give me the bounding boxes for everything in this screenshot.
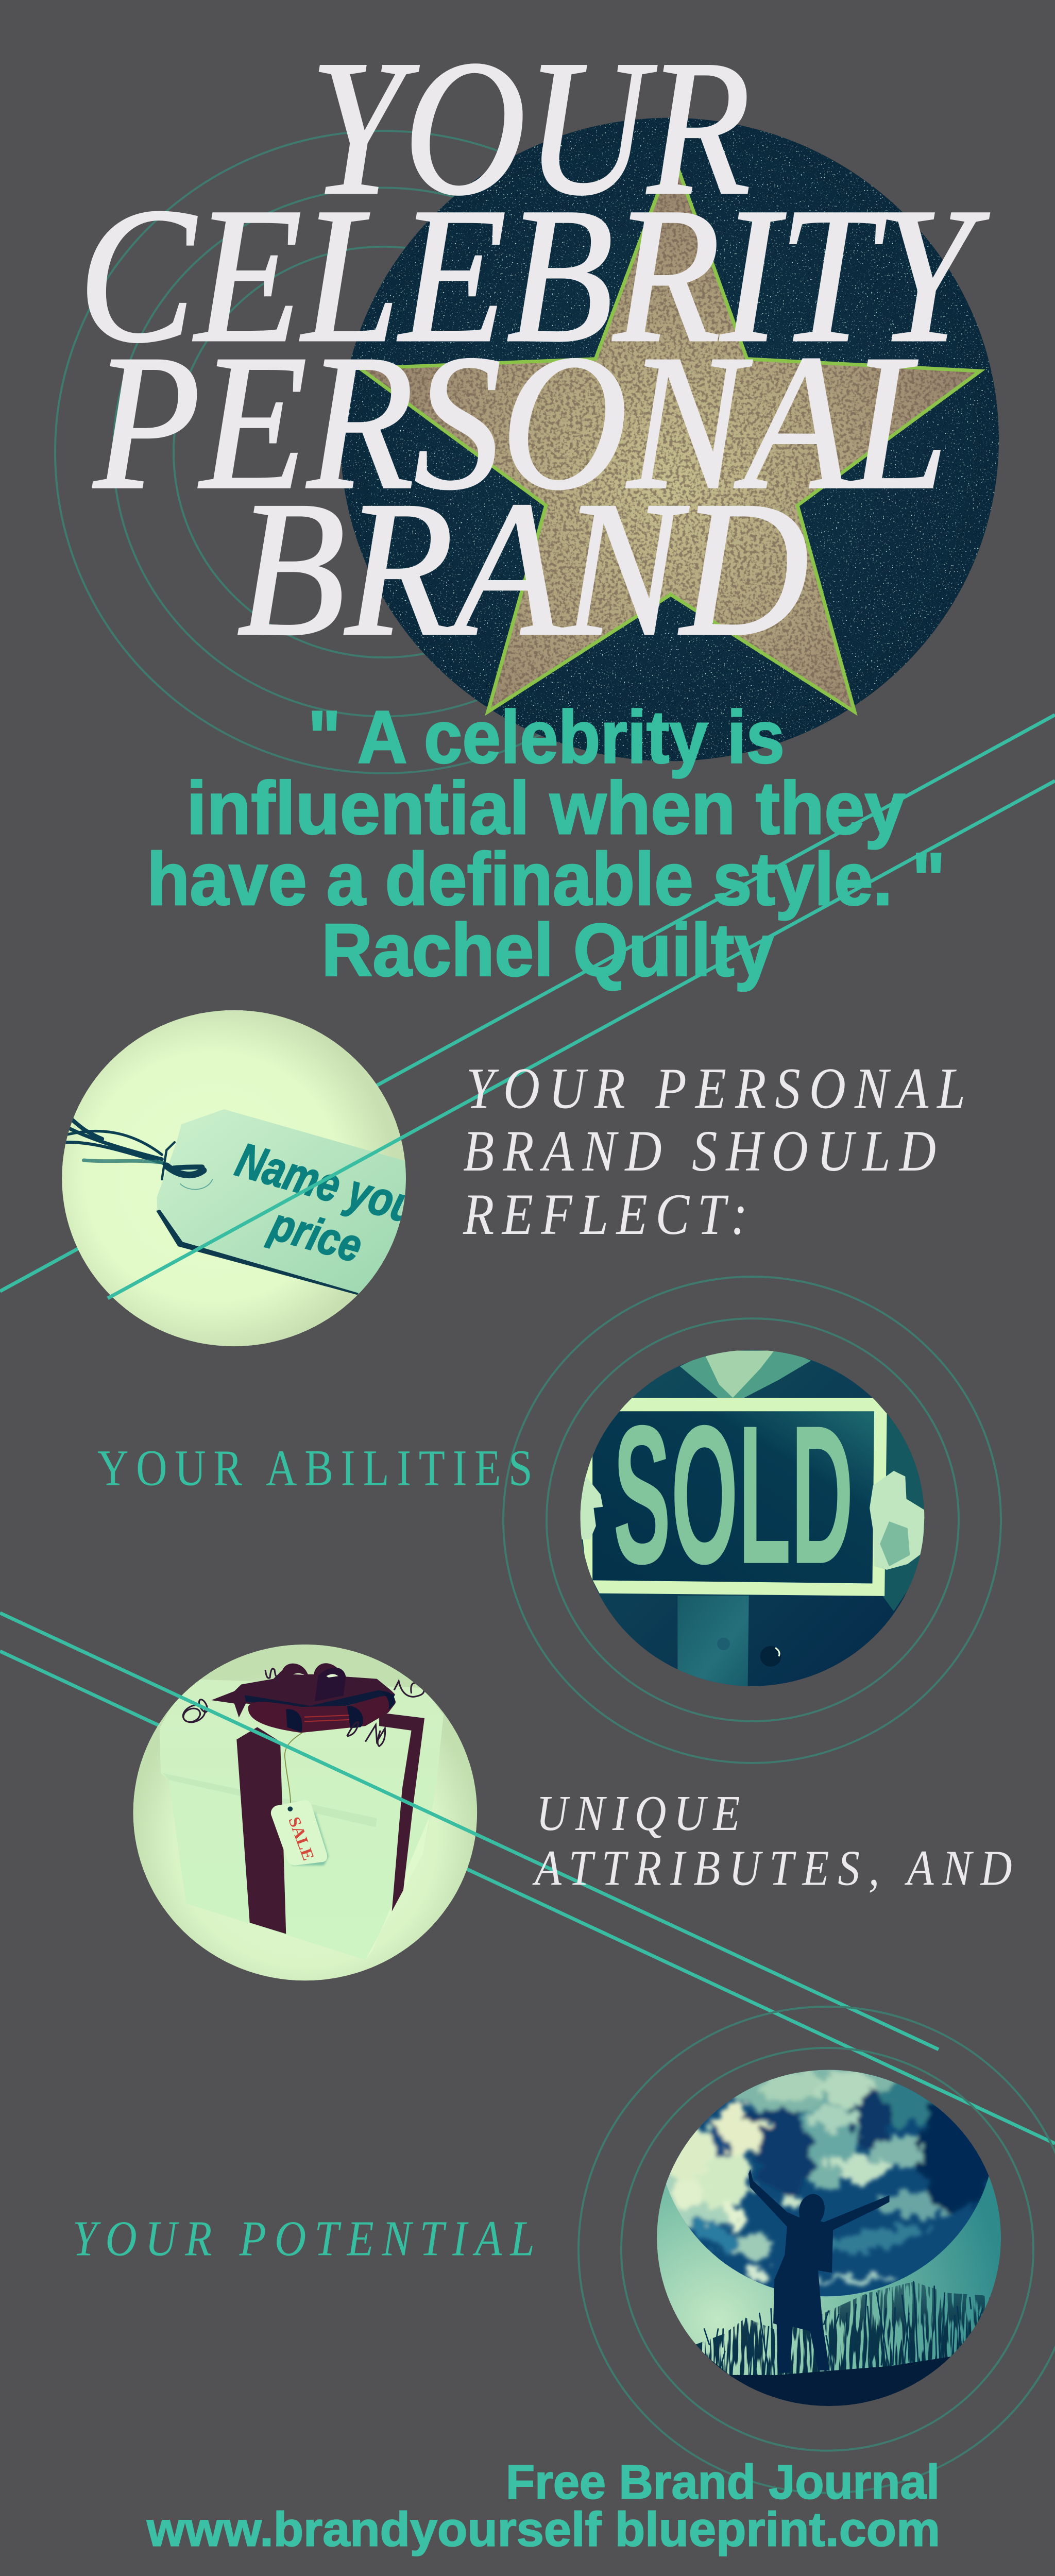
quote	[147, 696, 945, 992]
quote: Rachel Quilty	[321, 909, 774, 992]
clouds	[718, 2059, 911, 2113]
planet	[657, 1966, 995, 2296]
ribbon	[236, 1727, 286, 1934]
text: your personal brand should reflect: YOUR PERSONAL	[466, 1056, 965, 1121]
line: upper diagonal behind tag circle	[0, 715, 1055, 1291]
footer call to action: Free Brand Journal	[506, 2455, 940, 2509]
star photo circle	[340, 118, 999, 762]
title: PERSONAL	[91, 315, 948, 530]
quote: have a definable style. "	[147, 838, 945, 921]
sign dark panel	[592, 1411, 874, 1583]
tag text: Name your	[230, 1133, 440, 1239]
text: unique attributes, and: UNIQUE	[536, 1785, 740, 1841]
footer call to action: www.brandyourself blueprint.com	[146, 2502, 940, 2556]
image: person and earth circle	[654, 1966, 1008, 2412]
tag	[157, 1109, 410, 1296]
string	[285, 1733, 302, 1806]
line: lower diagonal over gift circle	[0, 1613, 939, 2049]
lower shirt	[677, 1596, 749, 1688]
collar	[680, 1351, 811, 1399]
tag shadow edge	[156, 1210, 359, 1295]
sale text: SALE	[285, 1815, 318, 1863]
text: unique attributes, and: ATTRIBUTES, AND	[532, 1840, 1012, 1896]
buttons	[717, 1638, 730, 1650]
text: your personal brand should reflect	[463, 1056, 965, 1246]
image: gift box circle	[133, 1645, 477, 1980]
person	[748, 2170, 890, 2373]
text: your potential: YOUR POTENTIAL	[73, 2210, 535, 2266]
text: your personal brand should reflect: BRAND SHOULD	[463, 1118, 936, 1183]
box	[160, 1679, 444, 1960]
line: lower diagonal behind gift circle	[0, 1651, 1055, 2144]
hands	[578, 1477, 603, 1539]
ground	[672, 2320, 1003, 2412]
sign sheet	[578, 1398, 887, 1596]
title	[78, 21, 991, 676]
text: your abilities: YOUR ABILITIES	[97, 1439, 533, 1496]
rings around sold image	[503, 1277, 1001, 1763]
tag text: price	[264, 1198, 368, 1273]
sale tag	[271, 1800, 327, 1866]
image: price tag circle	[62, 1010, 440, 1346]
line: upper diagonal over tag circle	[108, 781, 1055, 1298]
footer call to action	[146, 2455, 940, 2556]
quote: " A celebrity is	[308, 696, 785, 779]
text: your personal brand should reflect: REFLECT:	[463, 1182, 748, 1246]
title: YOUR	[310, 21, 751, 235]
title: BRAND	[237, 462, 809, 676]
grass mass	[690, 2277, 1008, 2383]
bow	[211, 1663, 396, 1733]
curls	[180, 1669, 424, 1746]
rings around earth image	[578, 2007, 1055, 2493]
tag shadow	[292, 1811, 329, 1866]
concentric rings behind the star	[55, 131, 712, 773]
string	[65, 1120, 213, 1190]
tag text	[233, 1143, 405, 1261]
grass blades	[704, 2282, 982, 2376]
quote: influential when they	[186, 767, 905, 850]
text: unique attributes, and	[532, 1785, 1012, 1896]
dark continents	[756, 2119, 813, 2193]
image: sold sign circle	[578, 1350, 926, 1688]
